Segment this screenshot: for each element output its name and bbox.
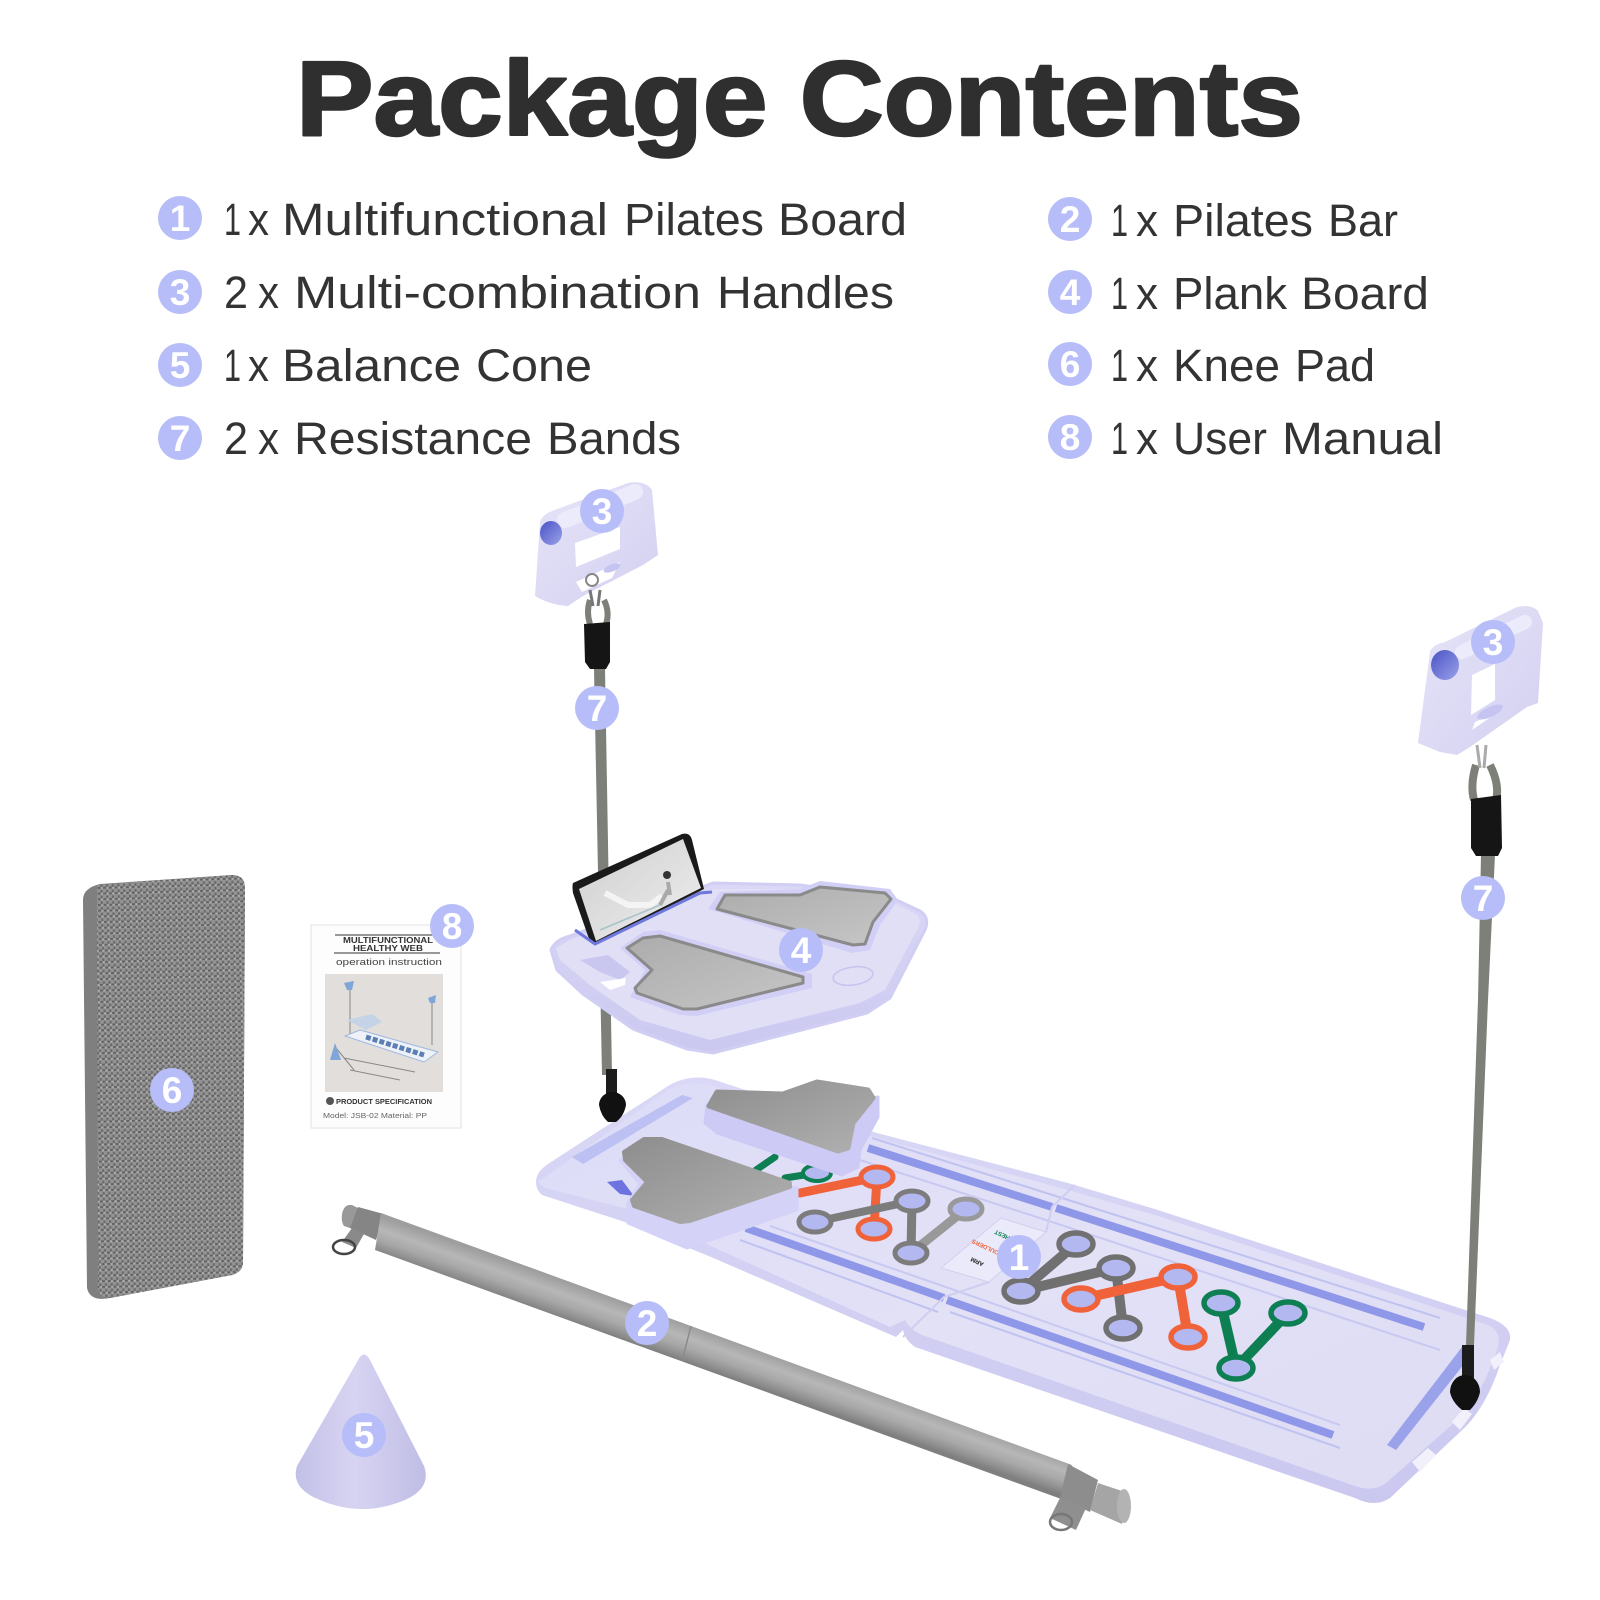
number badge 7 left: 7 (587, 688, 607, 729)
number badge 3 left: 3 (592, 491, 612, 532)
list item 2: Bar (1328, 195, 1398, 246)
list item 2 (1048, 195, 1398, 246)
list item 8: Manual (1282, 413, 1443, 464)
list item 3: x (258, 267, 279, 318)
balance cone (296, 1354, 426, 1509)
list item 3: 2 (224, 267, 248, 318)
number badge 7 left (575, 686, 619, 730)
list item 1: Pilates (624, 194, 764, 245)
list item 2: Pilates (1173, 195, 1313, 246)
board foot pad upper (705, 1082, 878, 1175)
list item 1: x (248, 194, 269, 245)
board base (536, 1078, 1510, 1503)
list item 5: 5 (170, 345, 190, 386)
plank base (551, 883, 927, 1053)
number badge 8 (430, 904, 474, 948)
list item 3 (158, 267, 894, 318)
number badge 1 (997, 1235, 1041, 1279)
contents list: right column (1048, 195, 1443, 464)
list item 7 (158, 413, 681, 464)
number badge 7 right: 7 (1473, 878, 1493, 919)
number badge 3 right: 3 (1483, 622, 1503, 663)
number badge 1: 1 (1009, 1237, 1029, 1278)
list item 4: Board (1301, 268, 1429, 319)
list item 6: 1 (1111, 340, 1128, 391)
resistance band left (584, 600, 626, 1122)
main pilates board (536, 1078, 1510, 1503)
number badge 2: 2 (637, 1303, 657, 1344)
number badge 3 left (580, 489, 624, 533)
list item 8 (1048, 413, 1443, 464)
plank foot pad right (708, 881, 898, 953)
list item 1: 1 (170, 198, 190, 239)
board card: SHOULDERS (971, 1237, 1008, 1259)
handle left (535, 482, 658, 606)
board end slots (572, 1095, 1504, 1472)
list item 6 (1048, 340, 1375, 391)
list item 6: 6 (1060, 344, 1080, 385)
list item 2: 1 (1111, 195, 1128, 246)
bar right cap (1050, 1464, 1131, 1530)
list item 3: Multi-combination (294, 267, 701, 318)
number badge 4: 4 (791, 930, 812, 971)
number badge 6 (150, 1068, 194, 1112)
manual product photo (325, 974, 443, 1092)
number badge 5: 5 (354, 1415, 374, 1456)
handle right (1418, 606, 1543, 755)
board top face (538, 1083, 1499, 1489)
list item 3: 3 (170, 272, 190, 313)
list item 2: 2 (1060, 199, 1080, 240)
title: Package Contents (296, 40, 1303, 158)
board exercise markings (756, 1157, 1305, 1379)
list item 4: Plank (1173, 268, 1287, 319)
number badge 5 (342, 1413, 386, 1457)
user manual: MULTIFUNCTIONAL (343, 936, 433, 945)
list item 2: x (1136, 195, 1158, 246)
list item 7: 2 (224, 413, 248, 464)
board card: ARM (970, 1255, 985, 1267)
list item 7: Bands (547, 413, 681, 464)
list item 4 (1048, 268, 1429, 319)
resistance band right (1450, 745, 1502, 1410)
number badge 4 (779, 928, 823, 972)
list item 6: Knee (1173, 340, 1280, 391)
list item 4: 1 (1111, 268, 1128, 319)
user manual: operation instruction (336, 957, 442, 967)
list item 4: x (1136, 268, 1158, 319)
bar left cap (333, 1205, 384, 1254)
list item 1 (158, 194, 907, 245)
list item 5: x (248, 340, 269, 391)
board card: CHEST (994, 1228, 1015, 1242)
list item 1: 1 (224, 194, 241, 245)
list item 5: 1 (224, 340, 241, 391)
number badge 3 right (1471, 620, 1515, 664)
pilates bar (333, 1205, 1131, 1530)
list item 7: x (258, 413, 279, 464)
user manual: Model: JSB-02 Material: PP (323, 1113, 427, 1120)
list item 6: x (1136, 340, 1158, 391)
list item 8: 8 (1060, 417, 1080, 458)
list item 6: Pad (1295, 340, 1375, 391)
list item 7: Resistance (294, 413, 532, 464)
list item 8: 1 (1111, 413, 1128, 464)
list item 4: 4 (1060, 272, 1081, 313)
list item 8: User (1173, 413, 1267, 464)
list item 3: Handles (717, 267, 894, 318)
bar tube (375, 1213, 1072, 1500)
list item 5 (158, 340, 592, 391)
number badge 2 (625, 1301, 669, 1345)
board card (941, 1218, 1046, 1282)
number badge 6: 6 (162, 1070, 182, 1111)
contents list: left column (158, 194, 907, 464)
user manual (311, 925, 461, 1128)
plank foot pad left (620, 930, 812, 1016)
board foot pad lower (620, 1139, 797, 1248)
list item 5: Cone (476, 340, 592, 391)
plank board (551, 834, 927, 1053)
list item 1: Board (778, 194, 907, 245)
phone (572, 834, 704, 944)
board lanes (740, 1138, 1440, 1448)
user manual: PRODUCT SPECIFICATION (336, 1099, 432, 1106)
list item 1: Multifunctional (282, 194, 608, 245)
number badge 7 right (1461, 876, 1505, 920)
list item 5: Balance (282, 340, 461, 391)
number badge 8: 8 (442, 906, 462, 947)
knee pad (83, 875, 245, 1299)
user manual: HEALTHY WEB (353, 944, 423, 953)
list item 7: 7 (170, 418, 190, 459)
list item 8: x (1136, 413, 1158, 464)
